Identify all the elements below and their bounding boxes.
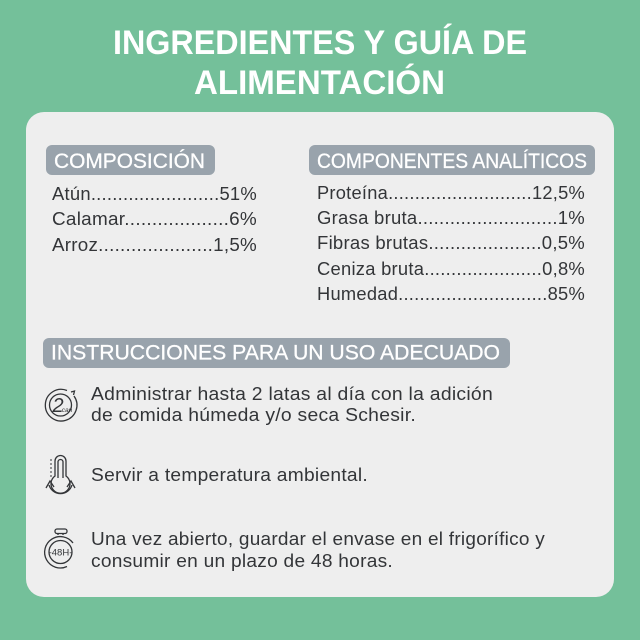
title	[113, 24, 527, 102]
title: INGREDIENTES Y GUÍA DE	[113, 24, 527, 62]
text block: analytic list: Fibras brutas.....................0,5%	[317, 233, 585, 253]
icon: 48h stopwatch: -48H-	[49, 548, 72, 558]
text block: analytic list: Grasa bruta..........................1%	[317, 208, 585, 228]
panel: composición	[46, 145, 257, 255]
title: ALIMENTACIÓN	[194, 64, 445, 102]
text block: analytic list: Ceniza bruta......................0,8%	[317, 259, 585, 279]
heading: componentes analíticos: COMPONENTES ANALÍTICOS	[317, 148, 587, 173]
text: instruction 3	[91, 529, 545, 571]
panel: main card	[26, 112, 614, 597]
heading: instrucciones: INSTRUCCIONES PARA UN USO ADECUADO	[51, 340, 500, 364]
icon: two cans: 2	[51, 395, 64, 417]
panel: componentes analíticos	[309, 145, 595, 304]
icon: thermometer	[46, 456, 75, 494]
text block: analytic list	[317, 183, 585, 304]
text: instruction 2: Servir a temperatura ambiental.	[91, 465, 368, 485]
text: instruction 3: consumir en un plazo de 48 horas.	[91, 551, 393, 571]
icon: two cans: can	[62, 407, 73, 414]
text block: analytic list: Proteína...........................12,5%	[317, 183, 585, 203]
icon: 48h stopwatch	[45, 529, 73, 568]
text block: composition list	[52, 184, 257, 255]
text: instruction 3: Una vez abierto, guardar el envase en el frigorífico y	[91, 529, 545, 549]
text: instruction 1	[91, 384, 493, 425]
text: instruction 1: de comida húmeda y/o seca Schesir.	[91, 405, 416, 425]
icon: two cans	[45, 389, 77, 421]
text block: composition list: Calamar...................6%	[52, 209, 257, 229]
text block: composition list: Atún........................51%	[52, 184, 257, 204]
text block: analytic list: Humedad............................85%	[317, 284, 585, 304]
text: instruction 1: Administrar hasta 2 latas al día con la adición	[91, 384, 493, 404]
panel: instrucciones	[43, 338, 545, 571]
text block: composition list: Arroz.....................1,5%	[52, 235, 257, 255]
heading: composición: COMPOSICIÓN	[54, 148, 205, 173]
